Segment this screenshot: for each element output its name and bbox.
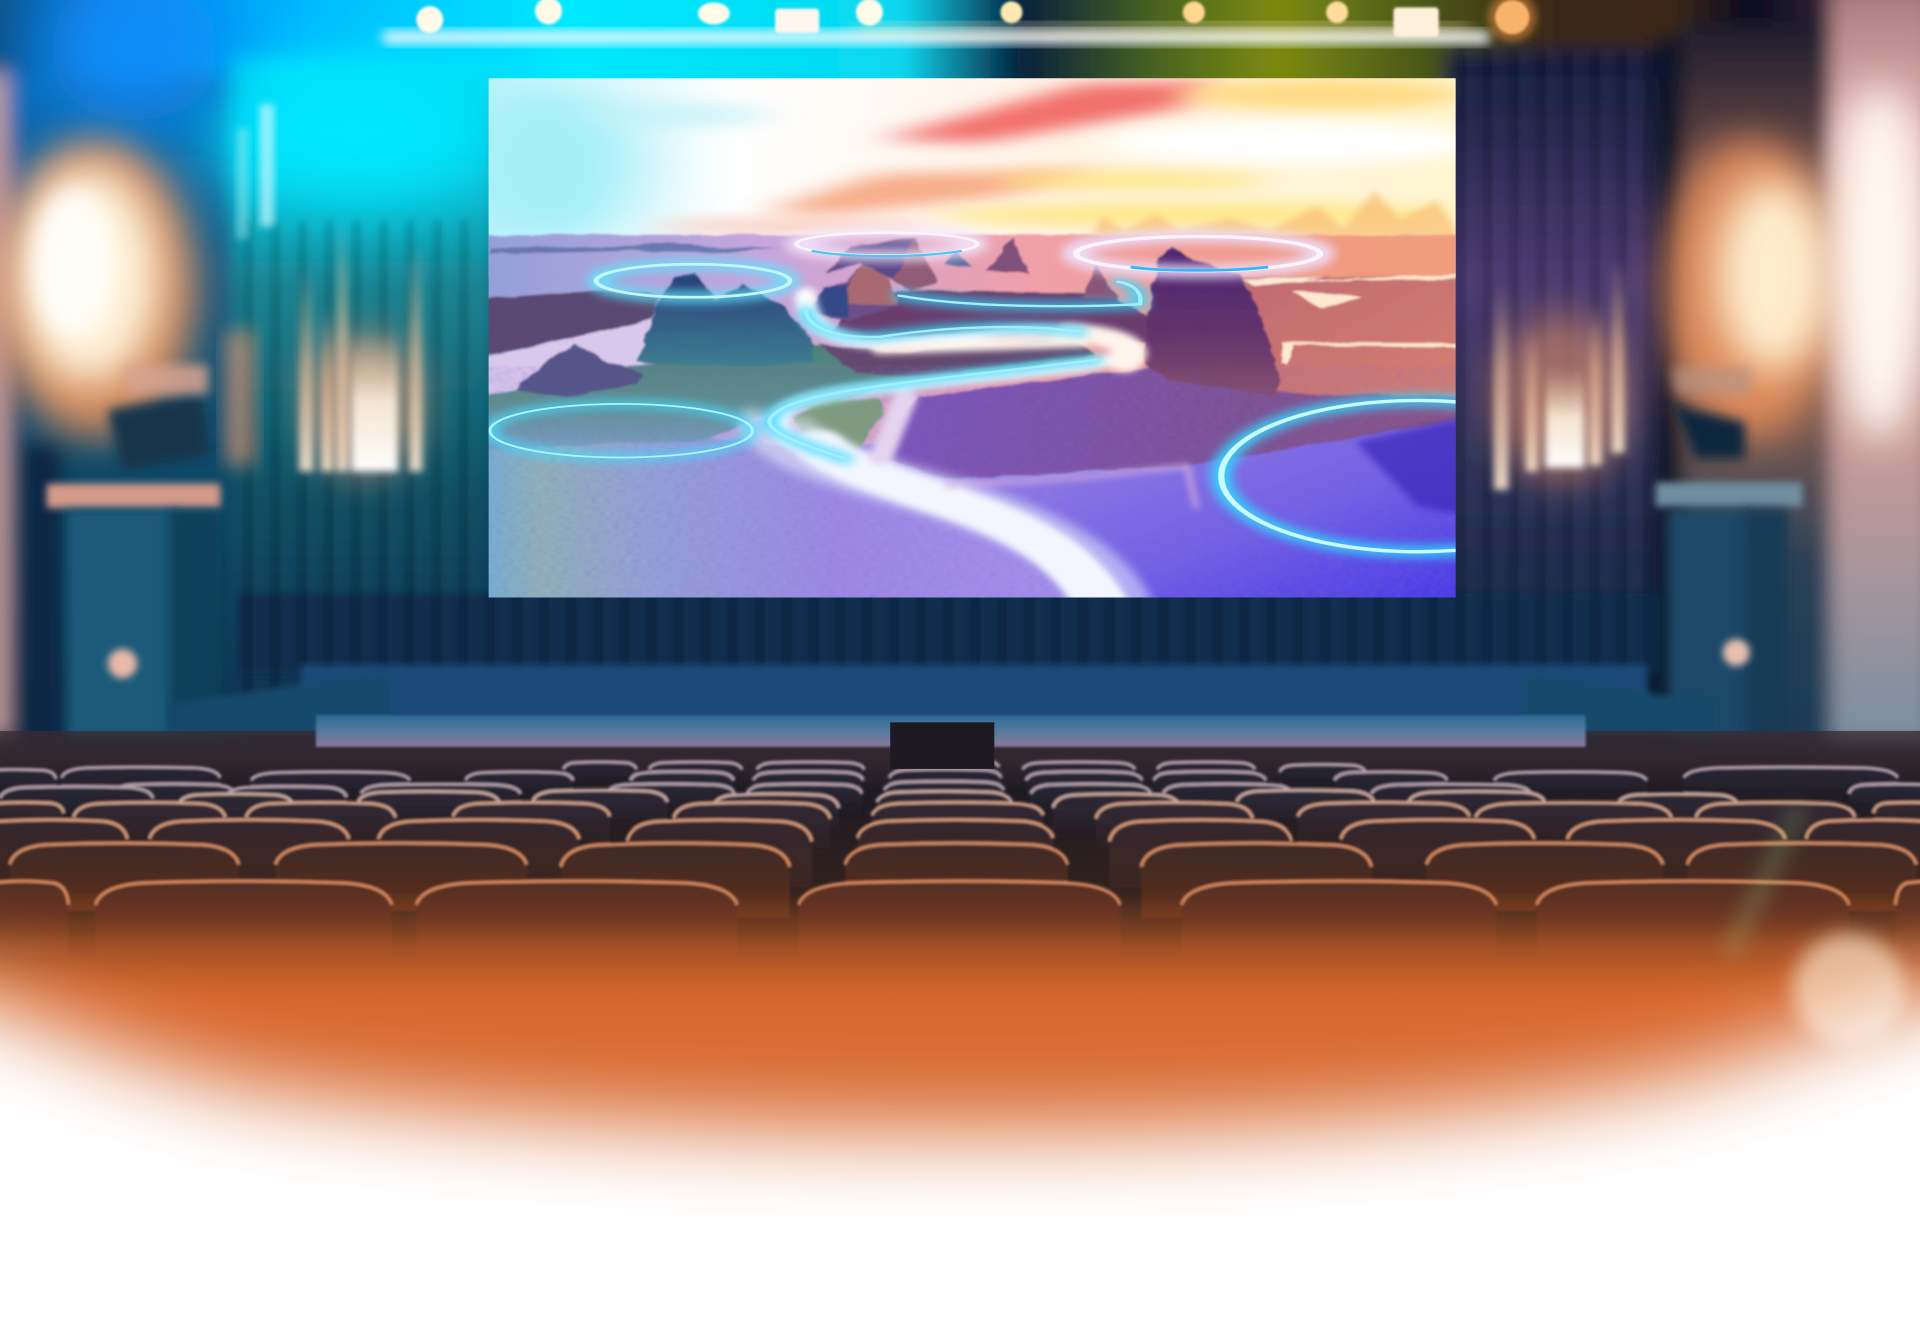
landscape painted with rough edges bbox=[488, 232, 1456, 598]
far treeline bbox=[1093, 191, 1456, 239]
seats: row four bbox=[0, 802, 1920, 853]
neon ring: far right bbox=[1073, 236, 1323, 272]
cinema screen image bbox=[488, 78, 1456, 598]
right water channels bbox=[1243, 273, 1481, 365]
river glow bbox=[778, 414, 1118, 614]
main mid land bbox=[881, 366, 1493, 480]
centre stage box bbox=[890, 722, 994, 769]
distant islands bbox=[489, 242, 781, 254]
curtain below screen bbox=[239, 594, 1659, 673]
small left rock bbox=[515, 344, 644, 397]
stage front bbox=[316, 715, 1586, 747]
orange fade over front seats bbox=[0, 808, 1920, 1337]
lens flare bbox=[1729, 808, 1905, 1046]
left rock cluster bbox=[637, 273, 812, 366]
water bbox=[462, 235, 1499, 448]
neon ring: upper left bbox=[596, 264, 790, 297]
central ridge land bbox=[831, 290, 1168, 345]
seats: back rows bbox=[0, 759, 1920, 824]
seats: row three bbox=[0, 820, 1920, 888]
left wall lamp glow bbox=[0, 138, 196, 437]
left channel bbox=[488, 317, 653, 396]
left curtain bbox=[225, 104, 484, 698]
bottom left forest bbox=[488, 438, 774, 598]
seats: row two bbox=[10, 843, 1916, 918]
ceiling lights bbox=[382, 0, 1537, 44]
left speaker and pedestal bbox=[47, 365, 220, 737]
small heart island bbox=[793, 399, 884, 459]
white fade at bottom of page bbox=[0, 955, 1920, 1337]
auditorium backdrop with coloured lighting bbox=[0, 0, 1920, 759]
seats: row five bbox=[178, 790, 1739, 838]
right curtain bbox=[1456, 49, 1652, 698]
neon ring: lower left bbox=[490, 404, 752, 458]
dark patch inside right ring bbox=[1356, 414, 1481, 517]
seats: front row bbox=[0, 881, 1920, 956]
central rocks bbox=[809, 237, 1118, 321]
big rock bbox=[1143, 245, 1281, 395]
sky bbox=[462, 70, 1481, 277]
bottom right forest bbox=[982, 418, 1456, 598]
left dark land bbox=[488, 290, 660, 356]
winding river bbox=[778, 294, 1196, 614]
right speaker and pedestal bbox=[1656, 367, 1802, 737]
right mangrove bbox=[1242, 275, 1456, 397]
neon river line bbox=[769, 282, 1140, 459]
mid dark band bbox=[818, 338, 1096, 376]
solid white page bottom bbox=[0, 1224, 1920, 1337]
stage top and side steps bbox=[171, 665, 1714, 735]
neon ring: right large bbox=[1221, 400, 1615, 552]
seating rows bbox=[0, 759, 1920, 956]
green land bbox=[488, 344, 1096, 450]
forest texture bbox=[468, 366, 1493, 607]
neon ring: far centre bbox=[796, 233, 977, 256]
right wall lamp glow bbox=[1663, 86, 1920, 441]
auditorium floor bbox=[0, 731, 1920, 1337]
lilac underlay bbox=[776, 444, 1175, 598]
